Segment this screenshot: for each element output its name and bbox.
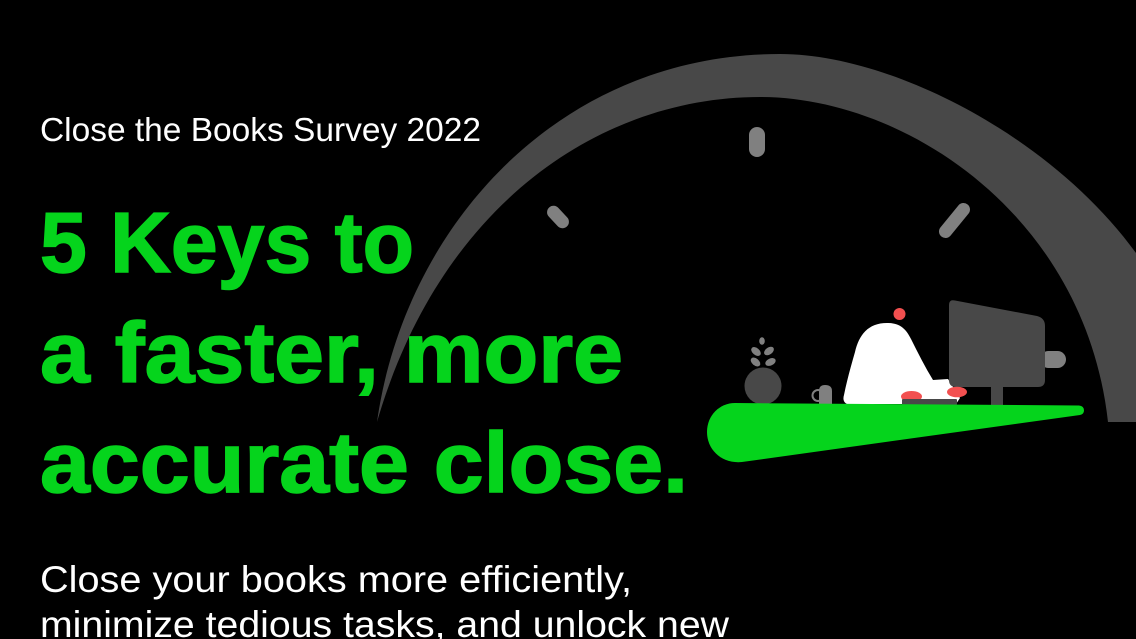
subtitle: Close the Books Survey 2022 bbox=[40, 112, 481, 149]
monitor bbox=[949, 300, 1066, 407]
illustration: person at desk bbox=[707, 300, 1084, 462]
description: Close your books more efficiently, bbox=[40, 559, 632, 600]
description bbox=[40, 559, 729, 639]
person head dot bbox=[894, 308, 906, 320]
title: 5 Keys to bbox=[40, 196, 414, 291]
desk bbox=[707, 403, 1084, 462]
gauge ticks bbox=[544, 127, 973, 241]
title: accurate close. bbox=[40, 416, 688, 511]
gauge arc bbox=[377, 54, 1136, 422]
mug bbox=[812, 385, 832, 404]
plant pot bbox=[744, 337, 782, 404]
hands bbox=[901, 387, 967, 402]
title: a faster, more bbox=[40, 306, 623, 401]
title bbox=[40, 196, 688, 511]
keyboard bbox=[902, 399, 957, 405]
person bbox=[843, 323, 960, 404]
